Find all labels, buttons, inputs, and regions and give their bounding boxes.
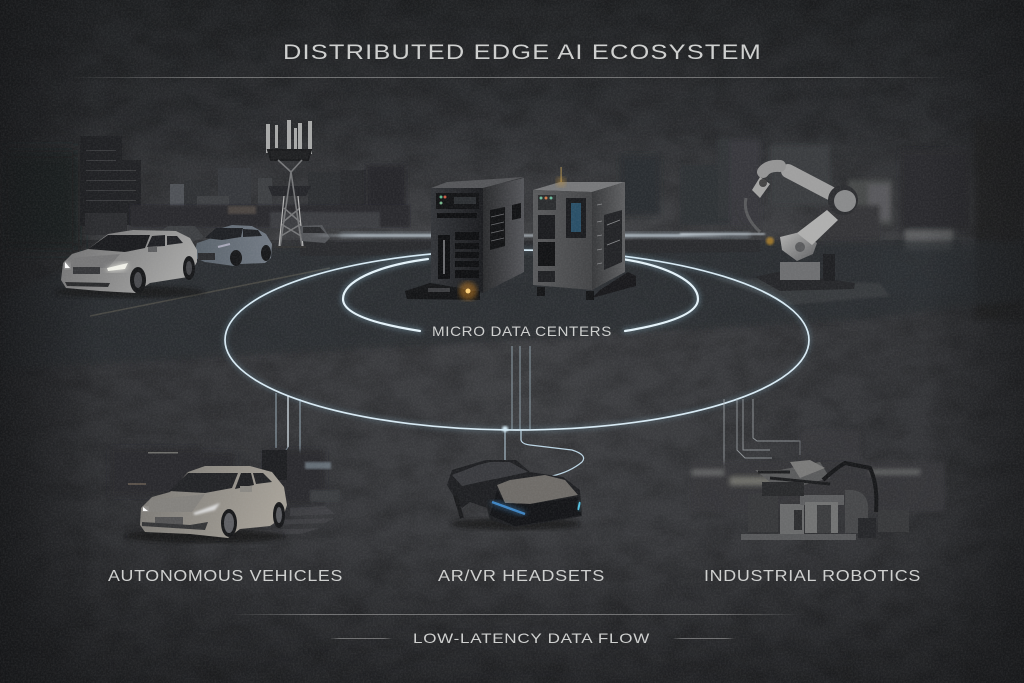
amber glow on base xyxy=(459,282,477,300)
inner connection ring xyxy=(343,259,698,331)
skyline: right city xyxy=(620,120,1024,320)
outer connection ring xyxy=(225,250,809,430)
lower-left car: autonomous vehicle xyxy=(125,466,287,543)
parked car in distance xyxy=(160,225,330,245)
footer left dash xyxy=(330,638,393,639)
data-link lines to robotics xyxy=(724,399,800,470)
skyline: left city xyxy=(0,136,410,250)
right streak spark xyxy=(680,233,774,245)
cell tower xyxy=(266,120,312,247)
data-link lines to headset xyxy=(502,346,584,476)
light streak behind hub xyxy=(310,232,750,238)
micro data center: right unit xyxy=(533,182,636,300)
title: DISTRIBUTED EDGE AI ECOSYSTEM xyxy=(283,41,762,64)
footer rule xyxy=(230,614,800,615)
category label: autonomous vehicles: AUTONOMOUS VEHICLES xyxy=(108,568,343,585)
category label: industrial robotics: INDUSTRIAL ROBOTICS xyxy=(704,568,921,585)
hub label: MICRO DATA CENTERS xyxy=(432,323,612,339)
footer right dash xyxy=(672,638,735,639)
category label: ar/vr headsets: AR/VR HEADSETS xyxy=(438,568,605,585)
ar/vr headset xyxy=(447,460,582,530)
data-link lines to vehicles xyxy=(276,393,300,465)
car: silver sedan foreground xyxy=(55,230,205,298)
industrial robotics machine xyxy=(741,460,909,540)
robot arm xyxy=(736,166,858,291)
car: blue-grey sedan xyxy=(195,225,272,266)
amber spark on top of right unit xyxy=(556,167,566,187)
title rule xyxy=(70,77,950,78)
ground city behind lower-left car xyxy=(110,448,340,535)
footer caption: LOW-LATENCY DATA FLOW xyxy=(413,630,650,646)
robotics background xyxy=(690,430,945,512)
micro data center: left unit xyxy=(405,177,524,300)
road and ground xyxy=(0,240,1024,370)
